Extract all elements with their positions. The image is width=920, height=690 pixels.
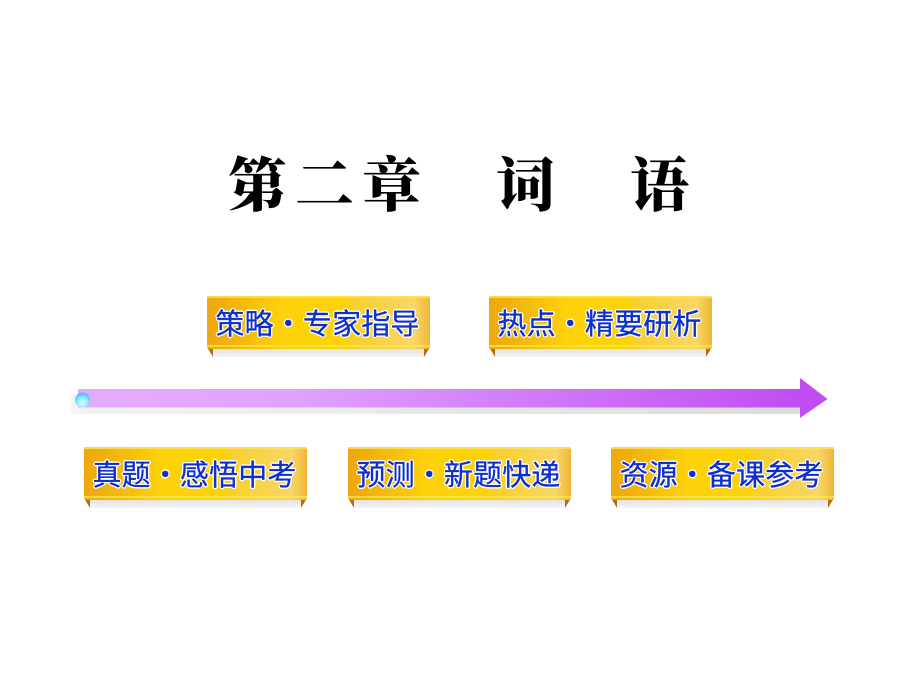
title [228, 153, 689, 219]
button: strategy [207, 296, 430, 357]
button: real exam questions: 真题・感悟中考 [92, 460, 297, 492]
button: hot topics: 热点・精要研析 [497, 309, 702, 341]
button: resources [611, 447, 834, 508]
title: word: 词 [496, 153, 555, 219]
button: strategy: 策略・专家指导 [215, 309, 420, 341]
button: hot topics [489, 296, 712, 357]
title: phrase: 语 [630, 153, 689, 219]
timeline arrow [71, 378, 828, 418]
button: resources: 资源・备课参考 [619, 460, 824, 492]
button: real exam questions [84, 447, 307, 508]
title: chapter number: 第二章 [228, 153, 429, 219]
button: forecast [348, 447, 571, 508]
button: forecast: 预测・新题快递 [356, 460, 561, 492]
